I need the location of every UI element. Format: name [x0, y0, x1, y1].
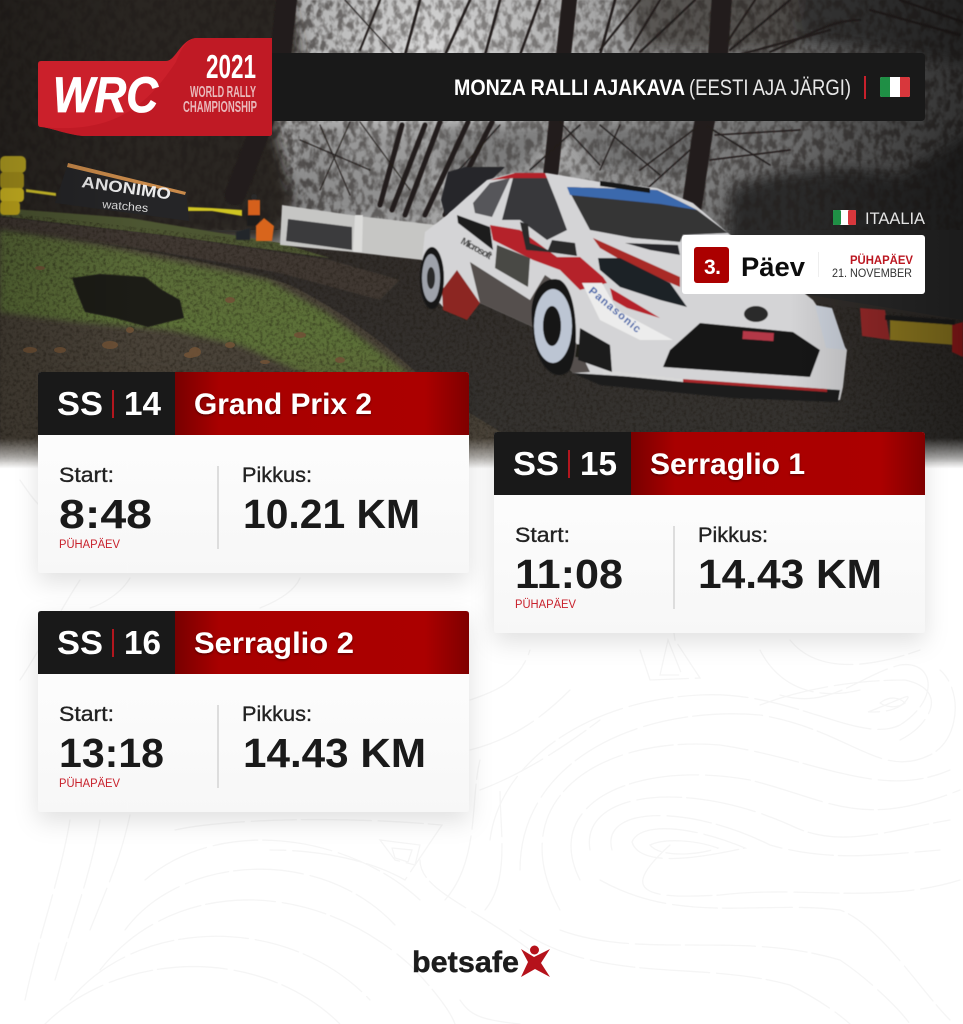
- SS 16 number header: [38, 611, 175, 674]
- photo: texture over the ground: [0, 212, 963, 470]
- stage name header: [175, 372, 469, 435]
- photo: Anonimo watches sign: watches: [101, 199, 149, 215]
- car: roof vent: [600, 181, 650, 193]
- text: country name: ITAALIA: [865, 209, 926, 228]
- SS 16 number header: SS: [57, 624, 103, 661]
- stage length: [242, 464, 420, 537]
- photo: rally car: Panasonic: [586, 285, 643, 335]
- photo: brown fallen leaves: [23, 266, 345, 364]
- car: mirror: [520, 222, 577, 256]
- icon: Italian flag: [880, 77, 910, 97]
- car: red roofline: [490, 173, 547, 180]
- icon: Betsafe figure: [521, 946, 550, 977]
- car: Microsoft lettering: Microsoft: [459, 236, 494, 262]
- stage length: 14.43 KM: [698, 551, 882, 597]
- logo: championship name: CHAMPIONSHIP: [183, 99, 257, 116]
- stage length: Pikkus:: [698, 524, 768, 547]
- car: mud on the door: [442, 270, 480, 320]
- logo: year: 2021: [206, 48, 256, 85]
- car: headlight: [598, 258, 687, 307]
- day badge: [682, 235, 925, 294]
- photo: roadside barrier on the right: [860, 308, 963, 357]
- car: Toyota badge: [744, 306, 768, 322]
- day badge: day word: Päev: [741, 252, 805, 282]
- photo: dark vignette: [0, 0, 963, 462]
- SS 15 number header: 15: [580, 445, 617, 482]
- stage name header: Serraglio 1: [650, 448, 805, 481]
- stage name header: [631, 432, 925, 495]
- start time: PÜHAPÄEV: [59, 778, 120, 790]
- background: topographic contour lines: [20, 480, 960, 1024]
- photo: grey track surface: [0, 217, 400, 300]
- day badge: number: 3.: [704, 256, 721, 279]
- car: front right panel: [815, 305, 846, 350]
- car: red hood stripe: [593, 238, 680, 287]
- stage length: [698, 524, 882, 597]
- stage length: 14.43 KM: [243, 730, 426, 776]
- panel: SS 14 Grand Prix 2: [38, 372, 469, 573]
- car: black side patch: [457, 215, 493, 250]
- photo: concrete barriers: [280, 205, 445, 262]
- day badge: date: 21. NOVEMBER: [832, 268, 912, 280]
- start time: 11:08: [515, 551, 623, 597]
- SS 15 number header: SS: [513, 445, 559, 482]
- start time: [59, 703, 164, 790]
- car: red under headlight: [610, 288, 660, 318]
- car: event sticker: [495, 245, 530, 287]
- photo: vehicle behind: [441, 167, 505, 215]
- start time: Start:: [59, 703, 114, 726]
- logo: championship name: WORLD RALLY: [190, 84, 256, 101]
- photo: Anonimo watches sign: ANONIMO: [80, 174, 172, 203]
- car: red lip: [683, 379, 827, 392]
- photo: overcast sky: [207, 0, 963, 244]
- logo: championship name: [183, 84, 257, 116]
- car: lower dark intake: [578, 328, 612, 372]
- car: front grille: [663, 323, 820, 377]
- car: white lip: [603, 370, 683, 382]
- start time: PÜHAPÄEV: [59, 539, 120, 551]
- car: blue sun strip: [567, 187, 697, 210]
- car: lower body shadow: [470, 262, 590, 373]
- stage name header: Grand Prix 2: [194, 388, 372, 421]
- photo: twiggy tree canopy texture: [208, 0, 963, 230]
- title: time zone note: (EESTI AJA JÄRGI): [689, 75, 851, 100]
- car: side window: [502, 178, 567, 240]
- SS 16 number header: 16: [124, 624, 161, 661]
- panel: SS 16 Serraglio 2: [38, 611, 469, 812]
- stage length: 10.21 KM: [243, 491, 420, 537]
- photo: bare trees: [235, 0, 963, 215]
- start time: PÜHAPÄEV: [515, 599, 576, 611]
- day badge: date: [818, 252, 913, 280]
- car: Panasonic panel: [582, 283, 673, 340]
- car: windscreen: [567, 187, 728, 242]
- start time: [515, 524, 623, 611]
- car: rear window: [473, 178, 510, 217]
- stage length: Pikkus:: [242, 464, 312, 487]
- SS 14 number header: [38, 372, 175, 435]
- day badge: date: PÜHAPÄEV: [850, 254, 913, 267]
- photo: strip of grass behind road: [0, 208, 330, 258]
- car: front wheel: [532, 279, 576, 375]
- start time: 13:18: [59, 730, 164, 776]
- background photo: rally car on a forest stage: [0, 0, 963, 472]
- stage name header: [175, 611, 469, 674]
- title: schedule heading: MONZA RALLI AJAKAVA: [454, 75, 685, 100]
- panel: SS 15 Serraglio 1: [494, 432, 925, 633]
- title: red divider: [864, 76, 866, 99]
- photo: fade to white: [0, 438, 963, 472]
- photo: brown earth under the grass: [0, 232, 500, 458]
- car: OMP sticker: [575, 344, 599, 360]
- SS 14 number header: 14: [124, 385, 162, 422]
- photo: Anonimo watches sign: [55, 163, 189, 221]
- photo: dark forest masses: [0, 0, 963, 340]
- car: white body: [422, 173, 847, 400]
- photo: tree stump: [72, 274, 184, 327]
- start time: 8:48: [59, 491, 152, 537]
- icon: Italian flag small: [833, 210, 856, 225]
- photo: green grass bank: [0, 228, 410, 372]
- start time: Start:: [59, 464, 114, 487]
- photo: yellow tyre barrier: [0, 156, 242, 216]
- stage name header: Serraglio 2: [194, 627, 354, 660]
- start time: [59, 464, 152, 551]
- stage length: Pikkus:: [242, 703, 312, 726]
- car: lower splitter: [573, 373, 840, 402]
- stage length: [242, 703, 426, 776]
- country label: [833, 209, 926, 228]
- car: number plate: [742, 331, 774, 341]
- SS 15 number header: [494, 432, 631, 495]
- photo: rally car: [420, 173, 847, 402]
- car: hood black vent: [625, 243, 680, 255]
- title bar: [272, 53, 925, 121]
- photo: dirt road and dark ground: [0, 238, 963, 455]
- start time: Start:: [515, 524, 570, 547]
- Betsafe logo: betsafe: [412, 946, 519, 979]
- car: rear wheel: [420, 247, 444, 309]
- day badge: number: [694, 247, 729, 283]
- car: red side stripe: [490, 225, 607, 290]
- photo: marshals in orange: [236, 194, 274, 241]
- WRC logo: [38, 38, 272, 136]
- SS 14 number header: SS: [57, 385, 103, 422]
- logo: WRC wordmark: WRC: [53, 67, 159, 123]
